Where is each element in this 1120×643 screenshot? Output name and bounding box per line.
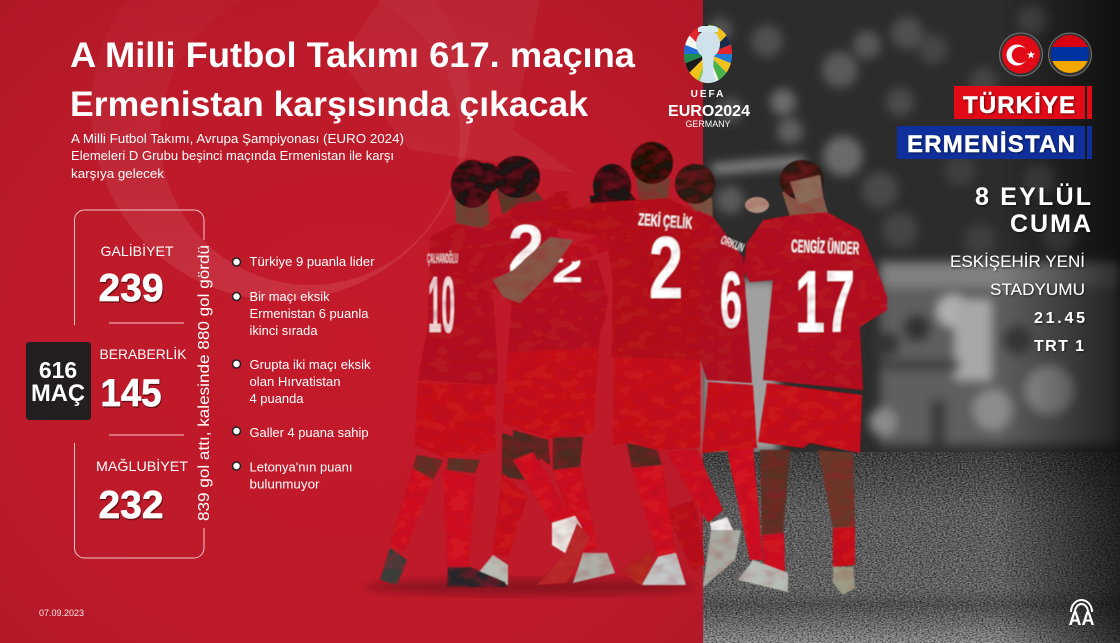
crescent watermark <box>91 0 471 300</box>
match date: CUMA <box>1010 210 1091 238</box>
player 17 Cengiz Ünder: 17 <box>795 252 855 351</box>
player 10: 10 <box>428 260 455 349</box>
stat: draws <box>100 345 187 415</box>
background leg <box>478 433 547 585</box>
bullet: Ermenistan <box>232 289 369 338</box>
flag: Turkey <box>1000 33 1042 76</box>
stat: losses: 232 <box>98 484 164 527</box>
title: Ermenistan karşısında çıkacak <box>70 85 589 124</box>
stat: draws: BERABERLİK <box>100 345 187 362</box>
player 22: 2 <box>508 211 544 287</box>
intro text block <box>71 131 404 181</box>
player 6: 6 <box>720 255 742 344</box>
match venue and broadcast: STADYUMU <box>990 280 1085 299</box>
player 2 Zeki Çelik: ZEKİ ÇELİK <box>638 210 693 233</box>
bullet: Letonya: Letonya'nın puanı <box>250 460 352 474</box>
match date: 8 EYLÜL <box>975 182 1091 211</box>
stat: draws: 145 <box>100 372 162 415</box>
total matches badge: MAÇ <box>31 380 85 407</box>
title <box>70 36 636 124</box>
panel frame <box>74 210 204 558</box>
bullet: Letonya: bulunmuyor <box>250 476 320 492</box>
bullet: Hırvatistan: olan Hırvatistan <box>250 374 340 389</box>
match venue and broadcast: ESKİŞEHİR YENİ <box>950 252 1085 271</box>
intro text block: Elemeleri D Grubu beşinci maçında Ermenistan ile karşı <box>71 148 394 163</box>
stat: losses <box>96 457 188 527</box>
team photo: players huddle <box>365 142 887 595</box>
match venue and broadcast: TRT 1 <box>1034 338 1084 355</box>
intro text block: karşıya gelecek <box>71 166 165 181</box>
logo: UEFA EURO 2024 <box>669 25 750 127</box>
match date <box>975 182 1091 238</box>
logo: UEFA EURO 2024: EURO2024 <box>668 103 750 120</box>
bullet: Ermenistan: ikinci sırada <box>250 323 318 338</box>
logo: UEFA EURO 2024: UEFA <box>691 89 725 100</box>
total matches badge: 616 <box>39 357 77 383</box>
bullet: Galler: Galler 4 puana sahip <box>250 425 368 440</box>
bullet: Hırvatistan: 4 puanda <box>250 391 304 406</box>
total matches badge <box>26 342 91 420</box>
bullet: Türkiye: Türkiye 9 puanla lider <box>250 254 375 269</box>
date stamp: 07.09.2023 <box>39 608 84 618</box>
match venue and broadcast: 21.45 <box>1034 310 1085 327</box>
bullet: Letonya <box>232 460 352 492</box>
flags <box>1000 33 1092 76</box>
player 10: ÇALHANOĞLU <box>427 249 458 266</box>
stat: wins: 239 <box>98 267 164 310</box>
icon: AA logo: AA <box>1068 609 1095 630</box>
panel: red background <box>0 0 704 643</box>
bullet: Ermenistan: Ermenistan 6 puanla <box>250 306 369 321</box>
player 22 <box>483 156 615 585</box>
tattooed arm <box>493 237 573 303</box>
stats panel: match record <box>26 210 213 558</box>
team label: Türkiye <box>954 86 1092 119</box>
bullet: Ermenistan: Bir maçı eksik <box>250 289 330 304</box>
team label: Türkiye: TÜRKİYE <box>963 92 1075 119</box>
team label: Ermenistan: ERMENİSTAN <box>907 131 1075 158</box>
stat: losses: MAĞLUBİYET <box>96 457 188 474</box>
star watermark <box>340 0 575 173</box>
player 10 <box>380 160 510 587</box>
player 6 <box>675 164 763 560</box>
bullet: Hırvatistan <box>232 357 371 406</box>
panel: grayscale stadium photo <box>703 0 1120 643</box>
ground shadow <box>365 579 695 595</box>
stat: wins <box>98 242 174 310</box>
match venue and broadcast <box>950 252 1085 355</box>
player 22: 2 <box>552 247 583 291</box>
group standings list <box>232 254 375 492</box>
player 6: ORKUN <box>719 233 746 255</box>
logo rainbow emblem <box>684 25 732 83</box>
logo: UEFA EURO 2024: GERMANY <box>686 119 731 130</box>
player 2 Zeki Çelik <box>548 142 741 587</box>
vertical goals text: 839 gol attı, kalesinde 880 gol gördü <box>196 245 213 521</box>
stat: wins: GALİBİYET <box>100 242 174 259</box>
icon: AA logo <box>1068 600 1095 630</box>
flag: Armenia <box>1048 33 1092 76</box>
intro text block: A Milli Futbol Takımı, Avrupa Şampiyonası (EURO 2024) <box>71 131 404 146</box>
back heads <box>471 163 501 193</box>
player 17 Cengiz Ünder <box>738 160 887 595</box>
title: A Milli Futbol Takımı 617. maçına <box>70 36 636 75</box>
player 17 Cengiz Ünder: CENGİZ ÜNDER <box>791 236 860 258</box>
player 2 Zeki Çelik: 2 <box>649 218 683 317</box>
bullet: Hırvatistan: Grupta iki maçı eksik <box>250 357 371 372</box>
